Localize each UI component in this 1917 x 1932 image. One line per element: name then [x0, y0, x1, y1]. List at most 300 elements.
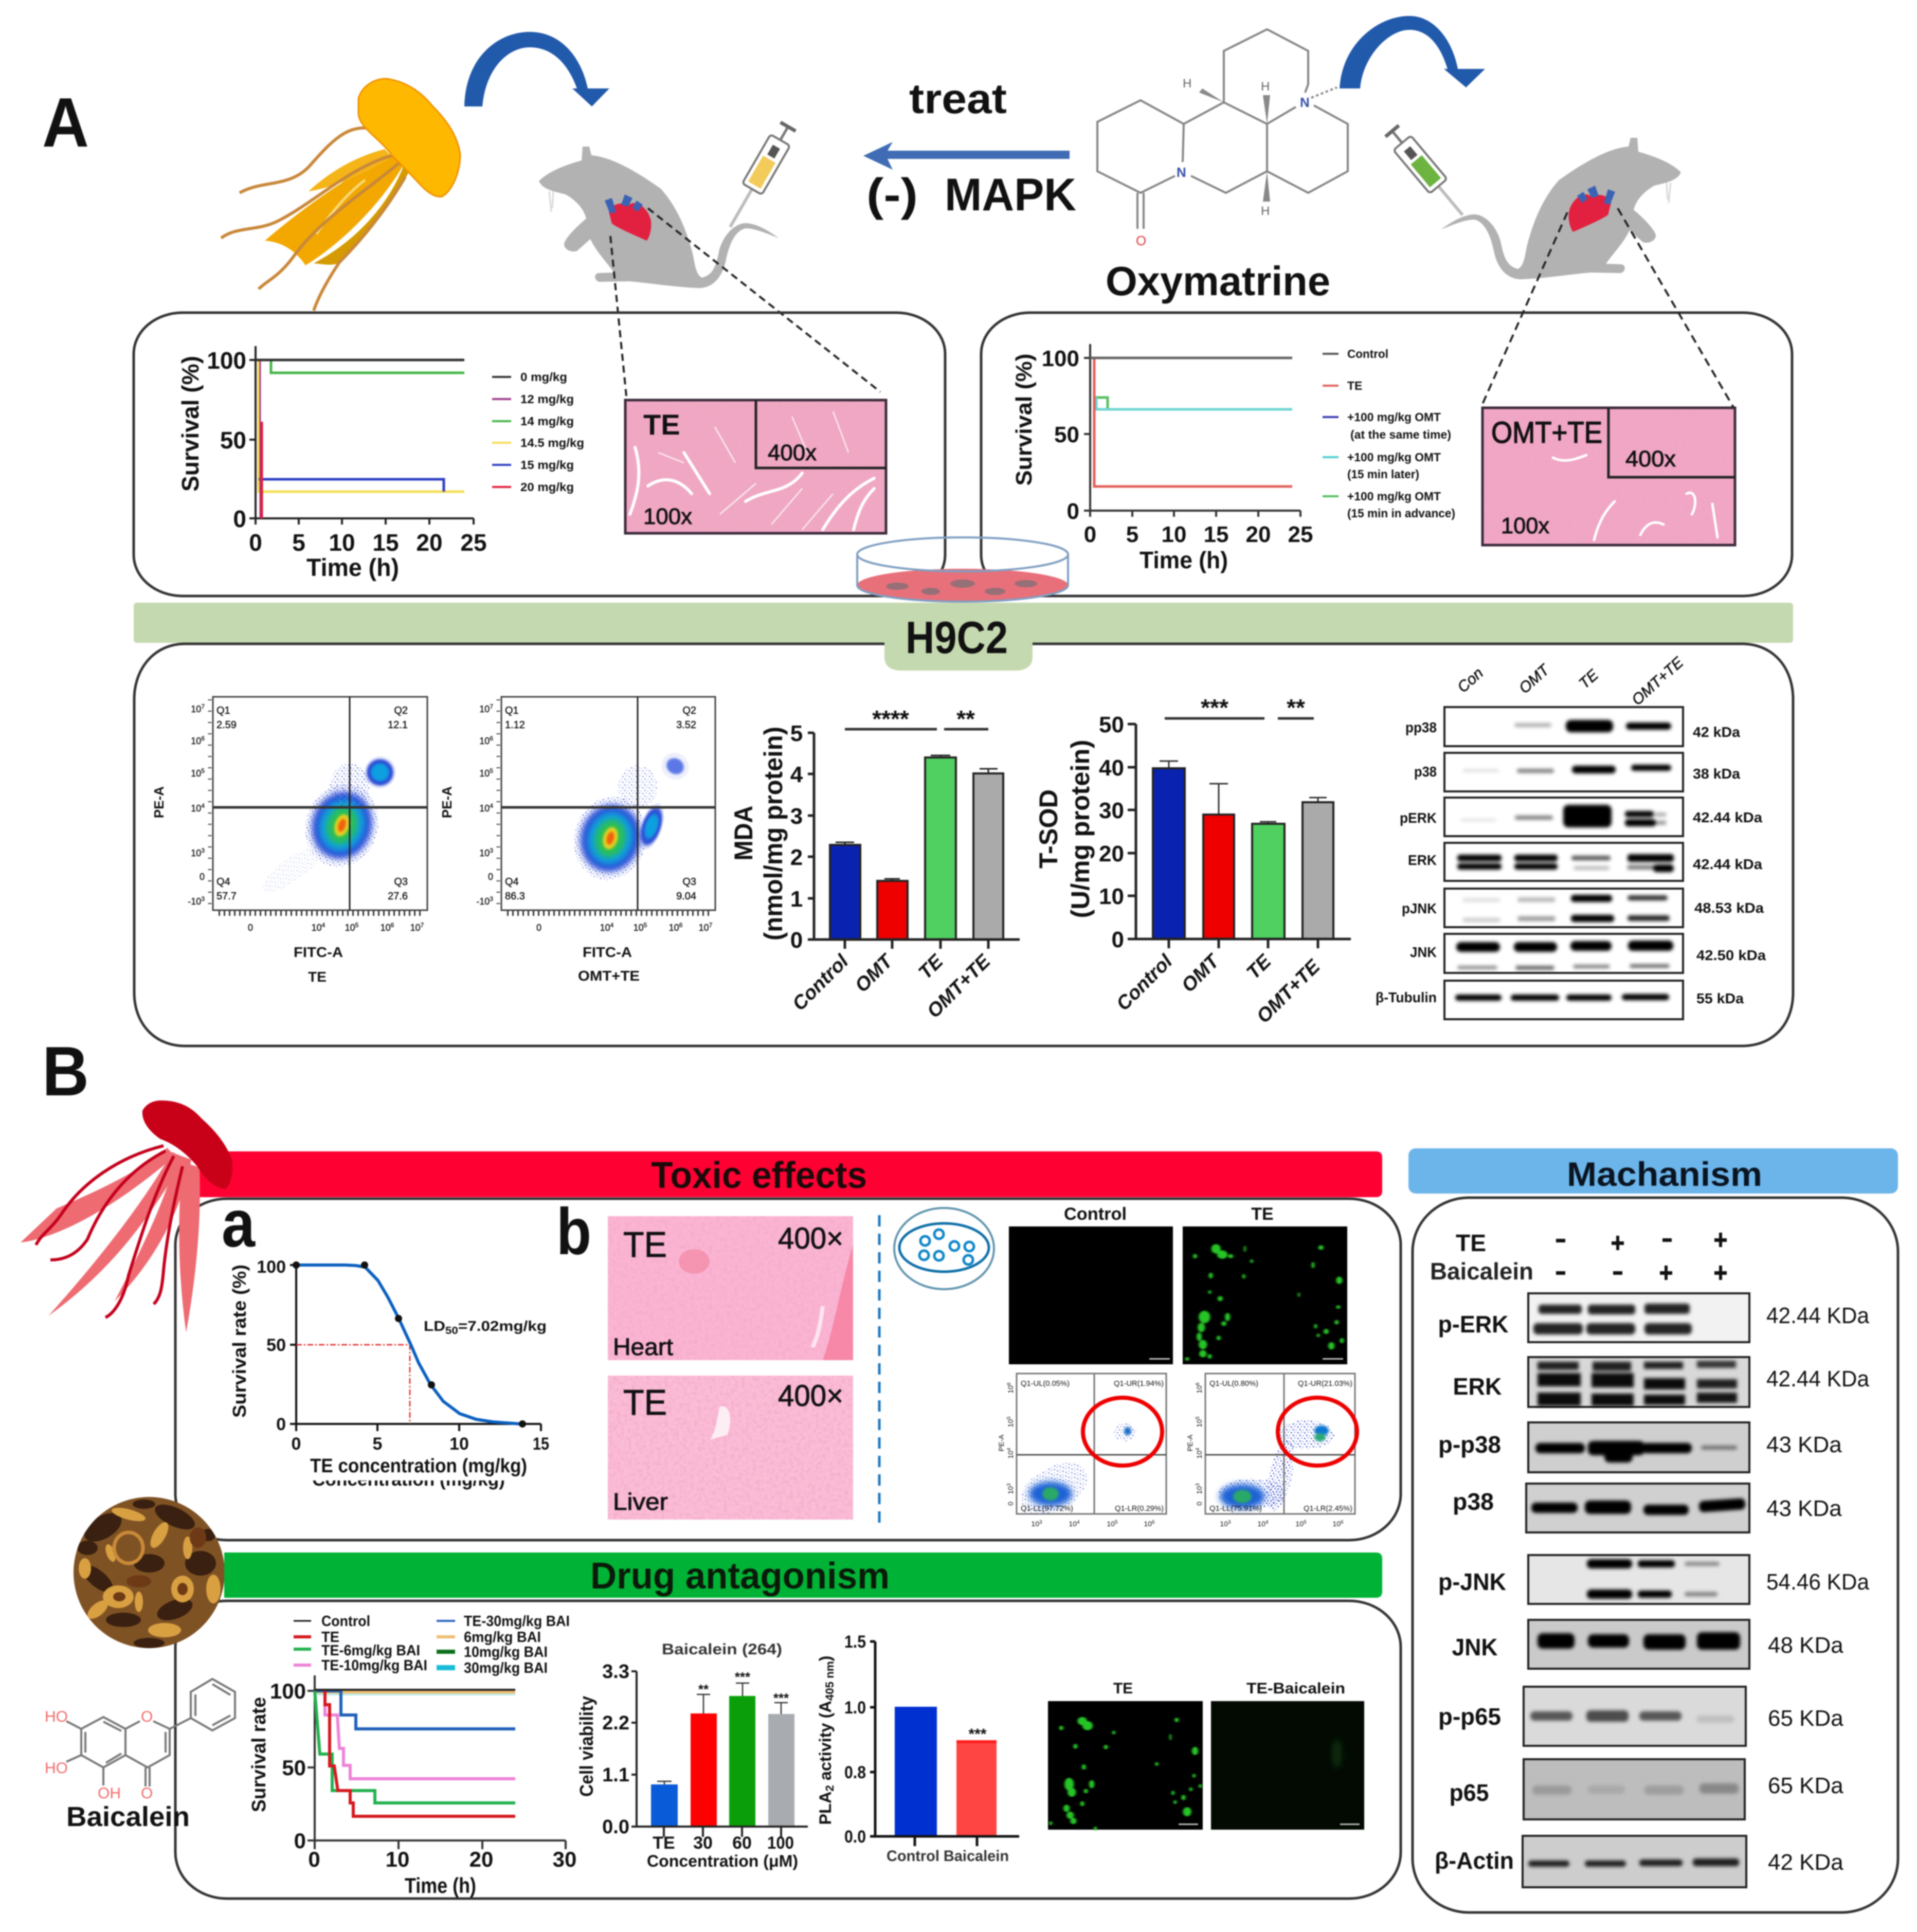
bar chart: T-SOD	[1034, 694, 1351, 1027]
panel: mechanism western blots: p-JNK	[1438, 1568, 1506, 1595]
flow cytometry plot: control: 10	[1006, 1451, 1015, 1459]
histology image: TE heart 100x with 400x inset: 400x	[768, 440, 817, 465]
bar chart: cell viability: ***	[735, 1669, 751, 1685]
bar chart: MDA: 0	[790, 928, 803, 953]
flow cytometry plot: OMT+TE: 4	[610, 922, 614, 929]
histology image: TE heart 100x with 400x inset: 100x	[643, 504, 692, 529]
flow cytometry plot: control: 5	[1115, 1520, 1118, 1525]
fluorescence image: TE	[1183, 1204, 1347, 1364]
bar chart: T-SOD: ***	[1201, 694, 1228, 721]
bar chart: PLA2 activity: 1.0	[844, 1698, 866, 1718]
flow cytometry plot: OMT+TE: PE-A	[439, 786, 455, 818]
histology image: liver: Liver	[613, 1488, 668, 1515]
chart: baicalein survival curves: 0	[294, 1829, 306, 1853]
label: (-) MAPK: (-)	[866, 169, 918, 220]
dashed zoom lines: OMT rat heart	[1482, 208, 1733, 407]
flow cytometry plot: TE: Q4	[216, 876, 230, 888]
flow cytometry plot: OMT+TE: 1.12	[505, 719, 525, 731]
icon: culture dish with cells	[894, 1208, 994, 1289]
chart: LD50 survival curve: 50	[445, 1325, 458, 1337]
icon: rat with heart (TE)	[539, 147, 779, 288]
treatment matrix	[1430, 1230, 1727, 1285]
bar chart: cell viability: Baicalein (264)	[662, 1641, 782, 1658]
flow cytometry plot: control: 3	[1039, 1520, 1042, 1525]
panel: mechanism western blots: 65 KDa	[1768, 1773, 1843, 1798]
chart: OMT survival curves: 100	[1042, 346, 1079, 371]
flow cytometry plot: control: 10	[1144, 1520, 1152, 1528]
bar chart: cell viability	[576, 1641, 808, 1870]
lane headers: Con	[1454, 664, 1487, 696]
treatment matrix: Baicalein	[1430, 1258, 1533, 1285]
flow cytometry plot: OMT+TE: FITC-A	[583, 944, 632, 960]
bar chart: PLA2 activity: )	[816, 1656, 835, 1661]
legend: TE dose groups: 15 mg/kg	[520, 458, 574, 472]
panel: H9C2 assays	[134, 644, 1793, 1046]
flow cytometry plot: OMT+TE: 3.52	[676, 719, 696, 731]
panel: mechanism western blots: p65	[1449, 1779, 1489, 1806]
panel: mechanism western blots: JNK	[1452, 1634, 1497, 1660]
legend: baicalein groups: 30mg/kg BAI	[464, 1660, 548, 1676]
flow cytometry plot: TE: 6	[1195, 1382, 1201, 1385]
flow cytometry plot: OMT+TE: 0	[536, 923, 541, 933]
flow cytometry plot: OMT+TE: Q3	[682, 876, 696, 888]
chart: OMT survival curves: Time (h)	[1140, 547, 1228, 573]
panel: mechanism western blots: p38	[1453, 1488, 1494, 1515]
flow cytometry plot: OMT+TE: 3	[490, 895, 493, 902]
panel: mechanism western blots	[1413, 1198, 1898, 1912]
histology image: liver: 400×	[778, 1379, 843, 1413]
bar chart: PLA2 activity: ***	[968, 1726, 987, 1743]
flow cytometry plot: control: Q1-LR(0.29%)	[1115, 1504, 1164, 1513]
flow cytometry plot: control: 10	[1031, 1520, 1039, 1528]
fluorescence image: TE with baicalein comparison: TE-Baicalein	[1246, 1680, 1345, 1697]
toxic effects header bar: Toxic effects	[651, 1155, 867, 1196]
western blots: MAPK panel in H9C2 cells: 42.44 kDa	[1693, 809, 1762, 825]
drug antagonism header bar: Drug antagonism	[590, 1556, 890, 1597]
panel: mechanism western blots: 42.44 KDa	[1766, 1303, 1869, 1328]
fluorescence image: TE with baicalein comparison: TE	[1113, 1680, 1133, 1697]
bar chart: MDA: ****	[872, 706, 909, 732]
histology image: heart: TE	[623, 1224, 667, 1265]
bar chart: T-SOD: 10	[1099, 884, 1124, 909]
bar chart: cell viability: 2.2	[602, 1712, 629, 1734]
bar chart: T-SOD: Control	[1112, 950, 1177, 1015]
histology image: TE heart 100x with 400x inset	[625, 400, 886, 533]
panel: mechanism western blots: 48 KDa	[1768, 1633, 1843, 1658]
bar chart: cell viability: 30	[693, 1833, 713, 1853]
chart: baicalein survival curves: Time (h)	[405, 1873, 476, 1898]
histology image: OMT+TE heart 100x with 400x inset	[1482, 408, 1735, 545]
chart: baicalein survival curves: 20	[469, 1847, 493, 1871]
icon: rat with heart (OMT)	[1441, 138, 1681, 279]
flow cytometry plot: TE: 5	[355, 922, 359, 929]
flow cytometry plot: OMT+TE: Q2	[682, 705, 696, 716]
chart: TE survival curves: 15	[372, 529, 399, 556]
flow cytometry plot: TE: 10	[1195, 1486, 1203, 1494]
chart: OMT survival curves: 25	[1288, 522, 1313, 547]
arrow: curved blue arrow to rat	[464, 32, 609, 106]
chart: OMT survival curves: 5	[1126, 522, 1138, 547]
chemical structure: oxymatrine: H	[1183, 77, 1191, 91]
flow cytometry plot: control: 10	[1006, 1419, 1015, 1428]
flow cytometry plot: control: 10	[1069, 1520, 1077, 1528]
chemical structure: baicalein: HO	[45, 1760, 68, 1777]
flow cytometry plot: TE: 5	[1304, 1520, 1307, 1525]
bar chart: T-SOD: 0	[1112, 927, 1124, 952]
flow cytometry plot: TE: 12.1	[388, 719, 408, 731]
western blots: MAPK panel in H9C2 cells: 38 kDa	[1693, 766, 1740, 782]
label: treat: treat	[909, 76, 1007, 122]
bar chart: cell viability: ***	[773, 1690, 789, 1706]
chart: LD50 survival curve: Survival rate (%)	[229, 1265, 250, 1418]
chemical structure: baicalein	[45, 1679, 235, 1832]
western blots: MAPK panel in H9C2 cells: β-Tubulin	[1376, 989, 1437, 1005]
chemical structure: baicalein: HO	[45, 1708, 68, 1725]
panel: mechanism western blots: 54.46 KDa	[1766, 1569, 1869, 1595]
legend: baicalein groups: TE-6mg/kg BAI	[321, 1642, 420, 1659]
histology image: heart	[608, 1216, 853, 1360]
legend: TE dose groups: 14 mg/kg	[520, 414, 574, 428]
flow cytometry plot: control: Q1-UR(1.94%)	[1114, 1379, 1164, 1388]
chart: baicalein survival curves: 50	[282, 1756, 306, 1780]
flow cytometry plot: TE: 5	[1195, 1416, 1201, 1419]
western blots: MAPK panel in H9C2 cells: 42.50 kDa	[1696, 947, 1766, 963]
chemical structure: oxymatrine: H	[1261, 80, 1270, 94]
chart: TE survival curves: 10	[329, 529, 355, 556]
western blots: MAPK panel in H9C2 cells: pJNK	[1402, 900, 1437, 916]
chart: baicalein survival curves: 30	[553, 1847, 576, 1871]
western blots: MAPK panel in H9C2 cells: pp38	[1405, 719, 1437, 735]
flow cytometry plot: OMT+TE: Q4	[505, 876, 519, 888]
bar chart: PLA2 activity: Control Baicalein	[887, 1848, 1009, 1865]
flow cytometry plot: TE: Q1-UL(0.80%)	[1209, 1379, 1258, 1388]
flow cytometry plot: TE: 3	[1195, 1483, 1201, 1486]
flow cytometry plot: TE	[1186, 1374, 1357, 1528]
bar chart: cell viability: **	[698, 1682, 709, 1697]
flow cytometry plot: control	[997, 1374, 1166, 1528]
chart: LD50 survival curve: 10	[449, 1434, 469, 1454]
bar chart: T-SOD: (U/mg protein)	[1066, 739, 1095, 918]
chart: baicalein survival curves: 100	[270, 1679, 306, 1703]
legend: OMT treatment groups: TE	[1347, 379, 1362, 392]
chemical structure: oxymatrine: O	[1136, 233, 1146, 248]
flow cytometry plot: TE: PE-A	[1186, 1434, 1194, 1451]
flow cytometry plot: OMT+TE: 10	[600, 923, 610, 933]
flow cytometry plot: OMT+TE: 10	[669, 923, 679, 933]
flow cytometry plot: control: Q1-LL(97.72%)	[1021, 1504, 1073, 1513]
histology image: OMT+TE heart 100x with 400x inset: 400x	[1625, 446, 1676, 472]
legend: baicalein groups: TE-10mg/kg BAI	[321, 1657, 427, 1674]
flow cytometry plot: TE	[151, 697, 427, 985]
fluorescence image: TE with baicalein comparison	[1048, 1680, 1364, 1831]
flow cytometry plot: TE: 10	[191, 768, 201, 779]
panel: mechanism western blots: 65 KDa	[1768, 1706, 1843, 1731]
chart: LD50 survival curve: 5	[373, 1434, 382, 1454]
flow cytometry plot: OMT+TE: Q1	[505, 705, 519, 716]
panel: OMT survival and histology	[981, 313, 1792, 596]
chart: baicalein survival curves: Survival rate	[248, 1697, 270, 1812]
western blots: MAPK panel in H9C2 cells: 48.53 kDa	[1694, 900, 1764, 916]
flow cytometry plot: OMT+TE: 7	[490, 703, 493, 710]
flow cytometry plot: TE: 0	[200, 872, 205, 882]
icon: petri dish	[857, 537, 1068, 602]
bar chart: MDA: 3	[790, 804, 803, 829]
flow cytometry plot: OMT+TE: 7	[709, 922, 713, 929]
icon: yellow syringe	[720, 121, 798, 232]
western blots: MAPK panel in H9C2 cells: JNK	[1410, 944, 1437, 960]
panel: TE survival and histology	[134, 313, 945, 596]
flow cytometry plot: TE: Q3	[394, 876, 408, 888]
panel: mechanism western blots: ERK	[1453, 1373, 1502, 1400]
panel: mechanism western blots: 43 KDa	[1766, 1432, 1842, 1457]
bar chart: MDA: (nmol/mg protein)	[759, 727, 788, 941]
legend: baicalein groups: TE	[321, 1629, 339, 1646]
western blots: MAPK panel in H9C2 cells	[1376, 654, 1766, 1019]
Machanism header bar	[1408, 1148, 1898, 1194]
legend: OMT treatment groups: (15 min in advance)	[1347, 507, 1455, 520]
flow cytometry plot: control: 6	[1152, 1520, 1155, 1525]
flow cytometry plot: TE: PE-A	[151, 786, 167, 818]
bar chart: PLA2 activity: 405 nm	[823, 1661, 836, 1701]
flow cytometry plot: TE: 10	[381, 923, 391, 933]
flow cytometry plot: OMT+TE: 3	[490, 847, 493, 854]
flow cytometry plot: control: 10	[1006, 1486, 1015, 1494]
flow cytometry plot: TE: 10	[410, 923, 421, 933]
fluorescence image: control: Control	[1064, 1204, 1127, 1224]
flow cytometry plot: TE: 10	[1220, 1520, 1228, 1528]
bar chart: MDA: 4	[790, 762, 803, 787]
flow cytometry plot: TE: 5	[201, 767, 205, 774]
bar chart: MDA: MDA	[729, 805, 758, 861]
label: Oxymatrine: Oxymatrine	[1106, 258, 1330, 304]
chart: OMT survival curves: 10	[1162, 522, 1186, 547]
histology image: TE heart 100x with 400x inset: TE	[643, 408, 680, 441]
flow cytometry plot: control: 4	[1077, 1520, 1080, 1525]
panel: mechanism western blots: 42.44 KDa	[1766, 1366, 1869, 1392]
bar chart: cell viability: 100	[767, 1833, 794, 1853]
flow cytometry plot: TE: -10	[188, 896, 201, 907]
lane headers: TE	[1576, 666, 1602, 692]
chart: TE survival curves: 50	[220, 427, 246, 454]
bar chart: cell viability: 3.3	[602, 1661, 629, 1683]
flow cytometry plot: TE: 4	[1265, 1520, 1269, 1525]
bar chart: MDA: 2	[790, 845, 803, 870]
arrow: curved blue arrow to second rat	[1340, 16, 1485, 88]
flow cytometry plot: OMT+TE: 10	[479, 848, 490, 858]
flow cytometry plot: TE: 3	[1228, 1520, 1231, 1525]
chart: OMT survival curves: 0	[1084, 522, 1096, 547]
flow cytometry plot: TE: Q1-LR(2.45%)	[1304, 1504, 1352, 1513]
legend: OMT treatment groups: +100 mg/kg OMT	[1347, 450, 1441, 464]
flow cytometry plot: control: 3	[1006, 1483, 1012, 1486]
legend: TE dose groups	[492, 370, 584, 494]
chart: OMT survival curves: Survival (%)	[1011, 354, 1037, 485]
legend: TE dose groups: 20 mg/kg	[520, 480, 574, 494]
chart: OMT survival curves: 0	[1067, 499, 1079, 524]
chart: LD50 survival curve: 50	[266, 1335, 286, 1355]
chart: OMT survival curves	[1011, 344, 1313, 573]
flow cytometry plot: TE: 0	[1195, 1502, 1203, 1506]
western blots: MAPK panel in H9C2 cells: ERK	[1408, 852, 1437, 868]
bar chart: T-SOD: OMT	[1178, 950, 1224, 997]
chart: TE survival curves: 0	[249, 529, 262, 556]
flow cytometry plot: TE: FITC-A	[294, 944, 343, 960]
legend: baicalein groups: 10mg/kg BAI	[464, 1644, 548, 1660]
legend: OMT treatment groups: +100 mg/kg OMT	[1347, 490, 1441, 503]
flow cytometry plot: TE: 3	[201, 847, 205, 854]
H9C2 header bar	[134, 603, 1793, 671]
chart: OMT survival curves: 15	[1204, 522, 1228, 547]
chart: LD50 survival curve: 0	[292, 1434, 301, 1454]
label b: b	[556, 1195, 591, 1269]
chart: TE survival curves: 25	[460, 529, 487, 556]
chart: TE survival curves: Time (h)	[306, 554, 399, 582]
bar chart: cell viability: 0.0	[602, 1816, 629, 1838]
panel: mechanism western blots: p-ERK	[1438, 1311, 1509, 1338]
flow cytometry plot: TE: 3	[201, 895, 205, 902]
bar chart: T-SOD: 30	[1099, 798, 1124, 823]
bar chart: PLA2 activity: activity (A	[816, 1701, 835, 1785]
chart: OMT survival curves: 20	[1246, 522, 1271, 547]
panel: mechanism western blots: 42 KDa	[1768, 1850, 1843, 1875]
panel: mechanism western blots: p-p38	[1438, 1431, 1501, 1458]
chemical structure: baicalein: Baicalein	[66, 1801, 190, 1832]
western blots: MAPK panel in H9C2 cells: p38	[1414, 764, 1437, 780]
flow cytometry plot: control: 10	[1006, 1385, 1015, 1394]
flow cytometry plot: OMT+TE: 10	[634, 923, 644, 933]
flow cytometry plot: OMT+TE: 6	[490, 735, 493, 742]
histology image: liver	[608, 1376, 853, 1520]
flow cytometry plot: control: 5	[1006, 1416, 1012, 1419]
fluorescence image: control	[1009, 1204, 1173, 1364]
flow cytometry plot: TE: 10	[191, 704, 201, 714]
flow cytometry plot: TE: 2.59	[216, 719, 237, 731]
legend: TE dose groups: 0 mg/kg	[520, 370, 567, 384]
chemical structure: oxymatrine: N	[1300, 95, 1310, 110]
arrow: blue inhibition arrow	[863, 142, 1070, 170]
bar chart: MDA: **	[956, 706, 975, 732]
bar chart: MDA: OMT	[851, 950, 898, 997]
icon: red jellyfish	[21, 1100, 232, 1332]
bar chart: T-SOD: **	[1287, 694, 1305, 721]
flow cytometry plot: control: PE-A	[997, 1434, 1005, 1451]
treatment matrix: TE	[1456, 1230, 1486, 1256]
icon: green syringe	[1384, 124, 1471, 222]
flow cytometry plot: TE: Q1-LL(75.91%)	[1209, 1504, 1262, 1513]
bar chart: cell viability: 60	[732, 1833, 752, 1853]
flow cytometry plot: OMT+TE: 9.04	[676, 891, 696, 902]
chart: LD50 survival curve: 100	[257, 1257, 286, 1277]
chart: LD50 survival curve: TE concentration (mg/kg)	[310, 1455, 527, 1477]
flow cytometry plot: control: 6	[1006, 1382, 1012, 1385]
label a: a	[222, 1186, 256, 1261]
flow cytometry plot: control: 10	[1107, 1520, 1115, 1528]
bar chart: PLA2 activity: 0.8	[844, 1763, 866, 1782]
flow cytometry plot: TE: 4	[322, 922, 325, 929]
histology image: liver: TE	[623, 1382, 667, 1422]
histology image: OMT+TE heart 100x with 400x inset: 100x	[1501, 513, 1549, 538]
chart: OMT survival curves: 50	[1054, 422, 1079, 447]
panel label B: B	[42, 1032, 89, 1110]
flow cytometry plot: TE: 10	[1295, 1520, 1304, 1528]
western blots: MAPK panel in H9C2 cells: 55 kDa	[1696, 990, 1744, 1006]
Machanism header bar: Machanism	[1567, 1155, 1762, 1193]
lane headers: OMT+TE	[1629, 654, 1687, 709]
legend: TE dose groups: 12 mg/kg	[520, 392, 574, 406]
flow cytometry plot: OMT+TE: 10	[479, 803, 490, 814]
flow cytometry plot: TE: TE	[308, 969, 327, 985]
bar chart: T-SOD: TE	[1242, 950, 1276, 984]
histology image: OMT+TE heart 100x with 400x inset: OMT+TE	[1491, 416, 1602, 449]
flow cytometry plot: TE: 6	[201, 735, 205, 742]
chart: baicalein survival curves: 10	[386, 1847, 409, 1871]
flow cytometry plot: TE: 7	[421, 922, 424, 929]
legend: OMT treatment groups: Control	[1347, 347, 1388, 360]
flow cytometry plot: TE: 10	[312, 923, 322, 933]
flow cytometry plot: TE: 10	[345, 923, 355, 933]
bar chart: T-SOD: 40	[1099, 755, 1124, 781]
bar chart: cell viability: Cell viability	[576, 1696, 597, 1797]
legend: OMT treatment groups	[1323, 347, 1455, 520]
flow cytometry plot: TE: 10	[1332, 1520, 1341, 1528]
flow cytometry plot: TE: Q2	[394, 705, 408, 716]
dashed zoom lines: TE rat heart	[610, 208, 880, 396]
western blots: MAPK panel in H9C2 cells: 42.44 kDa	[1693, 856, 1762, 872]
bar chart: T-SOD: OMT+TE	[1253, 955, 1325, 1027]
label: (-) MAPK: MAPK	[945, 169, 1076, 220]
flow cytometry plot: OMT+TE: 5	[490, 767, 493, 774]
chart: LD50 survival curve: 15	[533, 1434, 549, 1454]
flow cytometry plot: OMT+TE: 4	[490, 802, 493, 809]
chemical structure: baicalein: O	[141, 1785, 153, 1802]
legend: OMT treatment groups: (at the same time)	[1350, 428, 1451, 441]
chart: TE survival curves: 20	[416, 529, 443, 556]
chemical structure: baicalein: O	[141, 1708, 153, 1725]
flow cytometry plot: TE: 4	[1195, 1448, 1201, 1451]
legend: baicalein groups: TE-30mg/kg BAI	[464, 1613, 570, 1630]
legend: baicalein groups: Control	[321, 1613, 370, 1630]
flow cytometry plot: OMT+TE: 10	[479, 768, 490, 779]
panel: mechanism western blots: 43 KDa	[1766, 1496, 1842, 1521]
flow cytometry plot: TE: 10	[1195, 1451, 1203, 1459]
bar chart: T-SOD: 20	[1099, 841, 1124, 866]
flow cytometry plot: TE: 0	[248, 923, 253, 933]
legend: TE dose groups: 14.5 mg/kg	[520, 436, 584, 449]
flow cytometry plot: OMT+TE: 10	[479, 704, 490, 714]
bar chart: PLA2 activity: 2	[823, 1785, 836, 1792]
panel: drug antagonism	[45, 1601, 1401, 1899]
bar chart: MDA: Control	[788, 950, 853, 1015]
panel: toxic effects	[175, 1186, 1401, 1540]
flow cytometry plot: TE: 6	[391, 922, 394, 929]
bar chart: MDA: 1	[790, 887, 803, 912]
panel label A: A	[42, 83, 89, 161]
legend: OMT treatment groups: +100 mg/kg OMT	[1347, 410, 1441, 424]
flow cytometry plot: TE: Q1-UR(21.03%)	[1298, 1379, 1352, 1388]
flow cytometry plot: OMT+TE: 10	[699, 923, 709, 933]
bar chart: MDA: TE	[914, 950, 948, 984]
bar chart: T-SOD: 50	[1099, 712, 1124, 737]
bar chart: PLA2 activity: 1.5	[844, 1632, 866, 1652]
flow cytometry plot: control: 0	[1006, 1502, 1015, 1506]
flow cytometry plot: OMT+TE: 10	[479, 736, 490, 746]
fluorescence image: TE: TE	[1251, 1204, 1274, 1224]
bar chart: MDA: OMT+TE	[923, 950, 996, 1022]
chemical structure: oxymatrine: H	[1261, 204, 1270, 218]
flow cytometry plot: OMT+TE: -10	[476, 896, 490, 907]
flow cytometry plot: TE: 27.6	[388, 891, 408, 902]
bar chart: PLA2 activity	[816, 1632, 1019, 1865]
